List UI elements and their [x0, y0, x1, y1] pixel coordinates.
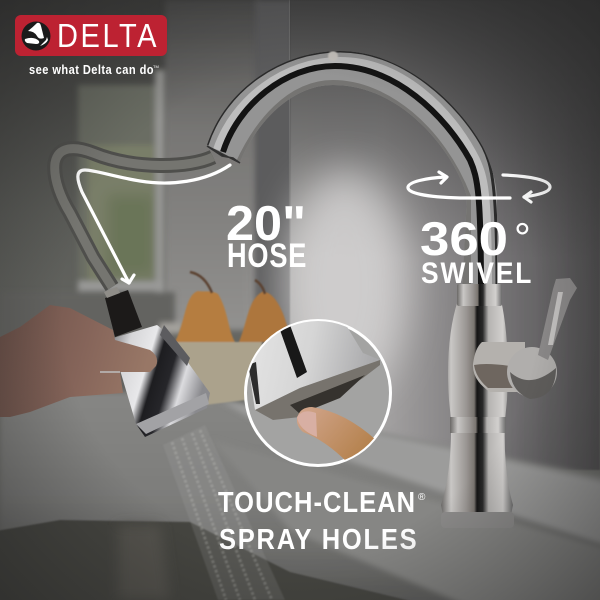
water spray — [163, 425, 285, 600]
arrow: hose length — [78, 165, 230, 283]
logo: Delta: DELTA — [57, 17, 159, 54]
label: 20 inch hose: 20" — [226, 197, 306, 251]
label: 360 swivel: ° — [514, 214, 531, 261]
middle wall panel — [165, 0, 260, 330]
inset fingertip — [297, 407, 376, 463]
pears in bowl — [172, 272, 290, 405]
dark column — [255, 0, 293, 400]
tagline: see what Delta can do — [29, 62, 154, 77]
label: touch-clean spray holes: TOUCH-CLEAN — [218, 485, 416, 518]
counter — [0, 392, 600, 600]
hand — [0, 305, 157, 417]
label: 360 swivel: 360 — [420, 212, 508, 265]
window — [0, 70, 182, 397]
logo mark — [22, 22, 50, 50]
bowl — [172, 342, 262, 405]
inset circle: touch-clean spray holes — [244, 319, 392, 467]
lever handle — [538, 278, 577, 360]
logo: Delta — [15, 15, 167, 77]
label: touch-clean spray holes: ® — [418, 492, 426, 503]
swivel rotation arrows — [408, 172, 550, 202]
pear left — [175, 291, 235, 342]
spray head and black connector — [104, 287, 210, 437]
logo: Delta: TM — [153, 64, 159, 69]
pear right — [239, 292, 290, 342]
lever hub — [473, 342, 525, 392]
spout tip edge — [207, 146, 240, 163]
hose — [55, 149, 213, 287]
inset chrome head — [250, 320, 380, 410]
label: touch-clean spray holes — [218, 485, 426, 555]
label: 360 swivel — [420, 212, 533, 289]
label: touch-clean spray holes: SPRAY HOLES — [219, 522, 418, 555]
base body — [441, 300, 513, 520]
label: 360 swivel: SWIVEL — [421, 255, 533, 289]
label: 20 inch hose: HOSE — [227, 236, 307, 275]
sink — [0, 520, 490, 600]
right wall — [290, 0, 600, 470]
spout — [207, 51, 497, 284]
label: 20 inch hose — [226, 197, 307, 275]
faucet — [200, 40, 577, 528]
